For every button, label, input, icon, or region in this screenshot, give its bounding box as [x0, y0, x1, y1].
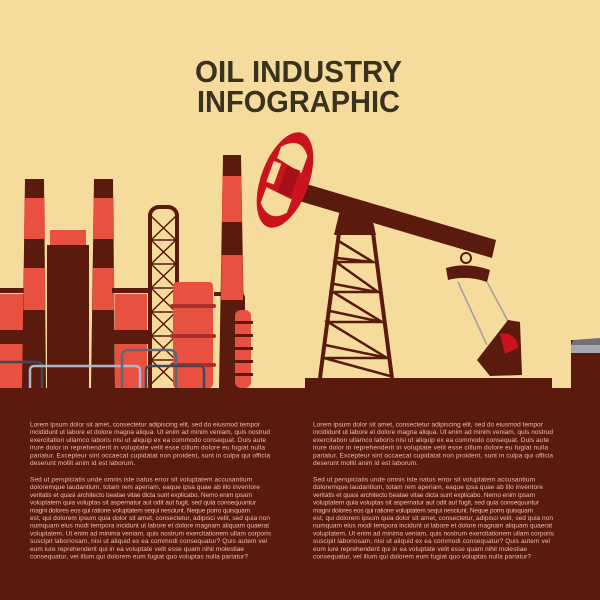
- title: [195, 54, 402, 119]
- small column: [235, 310, 251, 388]
- text column right: incididunt ut labore et dolore magna aliqua. Ut enim ad minim veniam, quis nostrud: [313, 429, 553, 436]
- text column left: voluptatem quia voluptas sit aspernatur aut odit aut fugit, sed quia consequuntur: [30, 500, 257, 507]
- text column right: suscipit laboriosam, nisi ut aliquid ex ea commodi consequatur? Quis autem vel: [313, 538, 551, 545]
- text column left: incididunt ut labore et dolore magna aliqua. Ut enim ad minim veniam, quis nostrud: [30, 429, 270, 436]
- red tank: [173, 282, 213, 388]
- text column right: irure dolor in reprehenderit in voluptate velit esse cillum dolore eu fugiat nulla: [313, 445, 548, 452]
- base platform: [305, 378, 552, 388]
- text column left: est, qui dolorem ipsum quia dolor sit amet, consectetur, adipisci velit, sed quia non: [30, 515, 270, 522]
- text column left: doloremque laudantium, totam rem aperiam, eaque ipsa quae ab illo inventore: [30, 484, 260, 491]
- chimney 1: [22, 179, 46, 388]
- text column right: est, qui dolorem ipsum quia dolor sit amet, consectetur, adipisci velit, sed quia non: [313, 515, 553, 522]
- refinery: [0, 155, 253, 388]
- text column right: voluptatem. Ut enim ad minima veniam, quis nostrum exercitationem ullam corporis: [313, 530, 555, 537]
- chimney 2: [91, 179, 115, 388]
- title: OIL INDUSTRY: [195, 54, 402, 89]
- text column right: consequatur, vel illum qui dolorem eum fugiat quo voluptas nulla pariatur?: [313, 554, 531, 560]
- text column left: consequatur, vel illum qui dolorem eum fugiat quo voluptas nulla pariatur?: [30, 554, 248, 560]
- text column right: Lorem ipsum dolor sit amet, consectetur adipiscing elit, sed do eiusmod tempor: [313, 422, 544, 428]
- text column left: exercitation ullamco laboris nisi ut aliquip ex ea commodo consequat. Duis aute: [30, 437, 266, 444]
- text column right: voluptatem quia voluptas sit aspernatur aut odit aut fugit, sed quia consequuntur: [313, 500, 540, 507]
- hanger and rods: [461, 253, 471, 263]
- central block: [50, 230, 86, 246]
- text column right: doloremque laudantium, totam rem aperiam, eaque ipsa quae ab illo inventore: [313, 484, 543, 491]
- text column right: deserunt mollit anim id est laborum.: [313, 460, 418, 467]
- right building: [571, 338, 600, 388]
- red building: [112, 288, 148, 293]
- pipes: [0, 350, 204, 388]
- text column right: [313, 422, 555, 560]
- title: INFOGRAPHIC: [197, 84, 400, 119]
- text column left: veritatis et quasi architecto beatae vitae dicta sunt explicabo. Nemo enim ipsam: [30, 492, 252, 499]
- walking beam: [299, 183, 496, 258]
- text column left: Sed ut perspiciatis unde omnis iste natus error sit voluptatem accusantium: [30, 476, 252, 484]
- text column right: veritatis et quasi architecto beatae vitae dicta sunt explicabo. Nemo enim ipsam: [313, 492, 535, 499]
- text column left: eum iure reprehenderit qui in ea voluptate velit esse quam nihil molestiae: [30, 546, 244, 553]
- pumpjack: [245, 125, 552, 388]
- text column left: magni dolores eos qui ratione voluptatem sequi nesciunt. Neque porro quisquam: [30, 507, 250, 514]
- counterweight crank: [477, 320, 522, 376]
- text column left: [30, 422, 272, 560]
- text column left: pariatur. Excepteur sint occaecat cupidatat non proident, sunt in culpa qui officia: [30, 452, 270, 459]
- text column right: pariatur. Excepteur sint occaecat cupidatat non proident, sunt in culpa qui officia: [313, 452, 553, 459]
- text column left: numquam eius modi tempora incidunt ut labore et dolore magnam aliquam quaerat: [30, 523, 269, 530]
- tall chimney: [214, 294, 243, 388]
- horse head wheel: [245, 125, 325, 235]
- text column left: irure dolor in reprehenderit in voluptate velit esse cillum dolore eu fugiat nulla: [30, 445, 265, 452]
- ground: [0, 388, 600, 600]
- text column left: suscipit laboriosam, nisi ut aliquid ex ea commodi consequatur? Quis autem vel: [30, 538, 268, 545]
- text column right: Sed ut perspiciatis unde omnis iste natus error sit voluptatem accusantium: [313, 476, 535, 484]
- text column left: voluptatem. Ut enim ad minima veniam, quis nostrum exercitationem ullam corporis: [30, 530, 272, 537]
- text column left: deserunt mollit anim id est laborum.: [30, 460, 135, 467]
- text column right: numquam eius modi tempora incidunt ut labore et dolore magnam aliquam quaerat: [313, 523, 552, 530]
- lattice derrick: [150, 207, 177, 388]
- A-frame tower: [320, 225, 392, 378]
- text column left: Lorem ipsum dolor sit amet, consectetur adipiscing elit, sed do eiusmod tempor: [30, 422, 261, 428]
- text column right: magni dolores eos qui ratione voluptatem sequi nesciunt. Neque porro quisquam: [313, 507, 533, 514]
- text column right: exercitation ullamco laboris nisi ut aliquip ex ea commodo consequat. Duis aute: [313, 437, 549, 444]
- text column right: eum iure reprehenderit qui in ea voluptate velit esse quam nihil molestiae: [313, 546, 527, 553]
- left tanks: [0, 288, 28, 293]
